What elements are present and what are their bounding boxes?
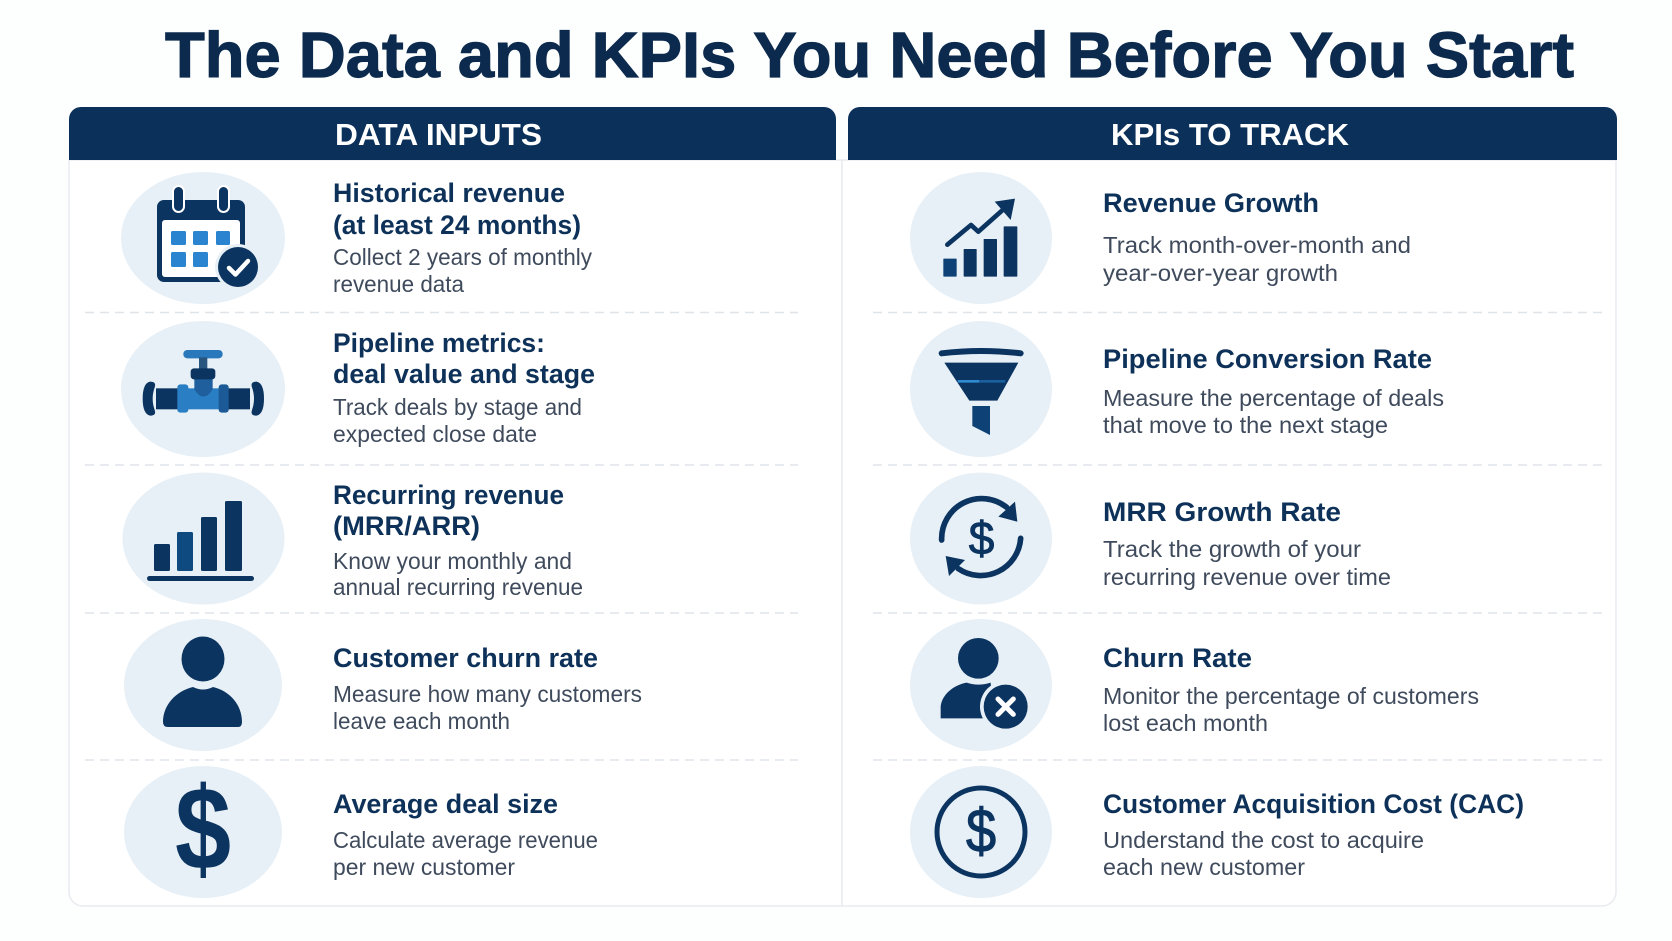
heading: average deal size: Average deal size — [333, 789, 558, 819]
row: mrr growth rate — [910, 472, 1391, 604]
description: mrr growth rate: recurring revenue over time — [1103, 564, 1391, 590]
description: pipeline conversion rate: that move to the next stage — [1103, 412, 1388, 438]
description: customer acquisition cost: Understand the cost to acquire — [1103, 827, 1424, 853]
description: recurring revenue: Know your monthly and — [333, 548, 572, 574]
description: customer acquisition cost: each new customer — [1103, 854, 1305, 880]
panel header: kpis to track — [848, 107, 1617, 160]
description: average deal size: Calculate average revenue — [333, 827, 598, 853]
row: recurring revenue — [122, 472, 583, 604]
row: customer acquisition cost — [910, 766, 1524, 898]
description: average deal size — [333, 827, 598, 880]
row: pipeline conversion rate — [910, 321, 1444, 457]
title: The Data and KPIs You Need Before You Start — [165, 19, 1574, 91]
description: historical revenue: Collect 2 years of monthly — [333, 244, 592, 270]
row: customer churn rate — [124, 619, 642, 751]
panel: kpis to track — [842, 107, 1617, 906]
description: revenue growth: Track month-over-month and — [1103, 232, 1411, 258]
description: mrr growth rate: Track the growth of your — [1103, 536, 1361, 562]
heading: historical revenue — [333, 178, 581, 240]
heading: pipeline metrics: deal value and stage — [333, 359, 595, 389]
description: customer churn rate: leave each month — [333, 708, 510, 734]
description: pipeline metrics — [333, 394, 582, 447]
description: recurring revenue: annual recurring revenue — [333, 574, 583, 600]
heading: customer churn rate: Customer churn rate — [333, 643, 598, 673]
description: revenue growth — [1103, 232, 1411, 286]
heading: recurring revenue: Recurring revenue — [333, 480, 564, 510]
description: recurring revenue — [333, 548, 583, 600]
description: churn rate — [1103, 683, 1479, 736]
row: average deal size — [124, 764, 598, 898]
heading: revenue growth: Revenue Growth — [1103, 188, 1319, 218]
panel header: data inputs: DATA INPUTS — [335, 117, 542, 152]
heading: recurring revenue — [333, 480, 564, 541]
heading: pipeline conversion rate: Pipeline Conversion Rate — [1103, 344, 1432, 374]
description: mrr growth rate — [1103, 536, 1391, 590]
description: historical revenue: revenue data — [333, 271, 464, 297]
panel header: data inputs — [69, 107, 836, 160]
heading: churn rate: Churn Rate — [1103, 643, 1252, 673]
heading: historical revenue: Historical revenue — [333, 178, 565, 208]
icon: person — [124, 619, 282, 751]
icon: circular arrows with dollar — [910, 472, 1052, 604]
icon: growth chart with arrow — [910, 172, 1052, 304]
panel: data inputs — [69, 107, 842, 906]
heading: recurring revenue: (MRR/ARR) — [333, 511, 480, 541]
description: churn rate: lost each month — [1103, 710, 1268, 736]
icon: pipeline valve — [121, 321, 285, 457]
description: pipeline metrics: Track deals by stage and — [333, 394, 582, 420]
description: historical revenue — [333, 244, 592, 297]
description: pipeline conversion rate — [1103, 385, 1444, 438]
icon: calendar with check — [121, 172, 285, 304]
row: pipeline metrics — [121, 321, 595, 457]
row: revenue growth — [910, 172, 1411, 304]
description: pipeline conversion rate: Measure the percentage of deals — [1103, 385, 1444, 411]
icon: dollar sign — [124, 764, 282, 898]
panel header: kpis to track: KPIs TO TRACK — [1111, 117, 1350, 152]
heading: historical revenue: (at least 24 months) — [333, 210, 581, 240]
heading: pipeline metrics — [333, 328, 595, 389]
icon: person with x badge — [910, 619, 1052, 751]
description: pipeline metrics: expected close date — [333, 421, 537, 447]
icon: funnel — [910, 321, 1052, 457]
row: historical revenue — [121, 172, 592, 304]
description: customer churn rate: Measure how many customers — [333, 681, 642, 707]
description: average deal size: per new customer — [333, 854, 515, 880]
icon: dollar sign: $ — [175, 764, 231, 895]
description: churn rate: Monitor the percentage of customers — [1103, 683, 1479, 709]
row: churn rate — [910, 619, 1479, 751]
description: revenue growth: year-over-year growth — [1103, 260, 1338, 286]
heading: customer acquisition cost: Customer Acquisition Cost (CAC) — [1103, 789, 1524, 819]
icon: bar chart — [122, 472, 284, 604]
heading: pipeline metrics: Pipeline metrics: — [333, 328, 545, 358]
description: customer acquisition cost — [1103, 827, 1424, 880]
icon: dollar coin — [910, 766, 1052, 898]
description: customer churn rate — [333, 681, 642, 734]
heading: mrr growth rate: MRR Growth Rate — [1103, 497, 1341, 527]
icon: dollar coin: $ — [966, 798, 996, 866]
icon: circular arrows with dollar: $ — [969, 512, 994, 564]
